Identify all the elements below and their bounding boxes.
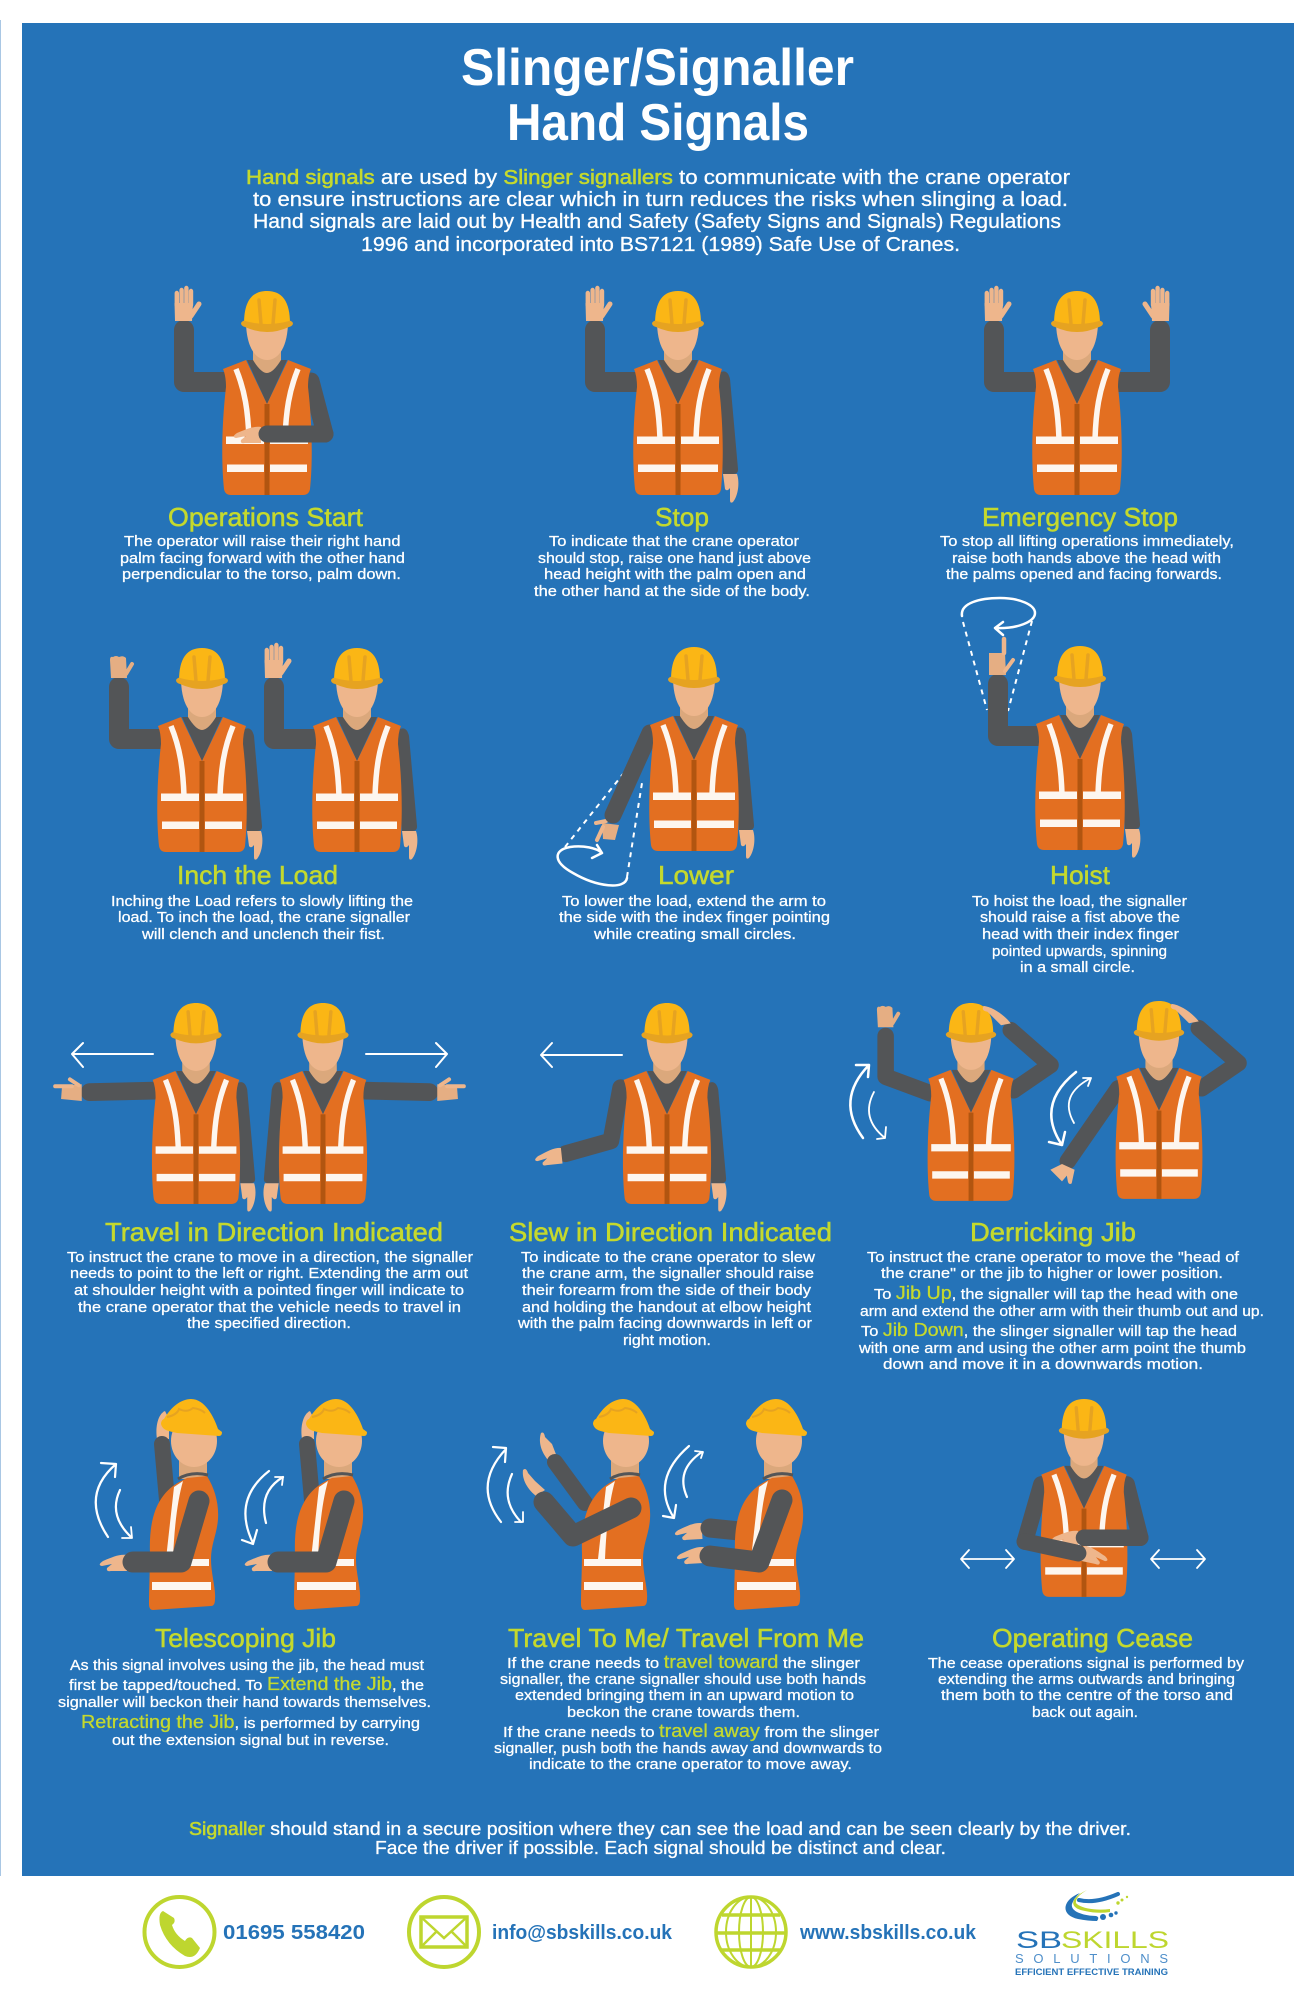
figure: stop (586, 288, 738, 503)
arrow: right double-headed (1151, 1550, 1205, 1568)
arrows: travel toward (488, 1447, 521, 1522)
arrow: left (72, 1043, 153, 1067)
description: extended bringing them in an upward motion to (515, 1687, 854, 1704)
description: needs to point to the left or right. Extending the arm out (70, 1265, 469, 1282)
description (559, 893, 830, 943)
figure: inch, palm open (264, 645, 417, 860)
closing note: Face the driver if possible. Each signal should be distinct and clear. (375, 1838, 946, 1858)
description: The cease operations signal is performed by (928, 1655, 1245, 1672)
description: To indicate to the crane operator to slew (521, 1249, 815, 1266)
intro text: Hand signals are used by Slinger signallers to communicate with the crane operator (246, 167, 1070, 189)
description (940, 533, 1234, 583)
description: should raise a fist above the (980, 909, 1180, 926)
closing note (189, 1819, 1131, 1858)
figure: pointing right (263, 1003, 464, 1211)
description: with one arm and using the other arm point the thumb (858, 1340, 1246, 1357)
description: palm facing forward with the other hand (120, 550, 405, 567)
panel: Lower (558, 647, 830, 943)
panel: Hoist (962, 598, 1187, 976)
footer: phone (144, 1897, 365, 1967)
description: the crane arm, the signaller should raise (522, 1265, 814, 1282)
heading: Slew in Direction Indicated (509, 1217, 832, 1247)
description (858, 1249, 1264, 1373)
figure: operations start (174, 288, 325, 495)
description: beckon the crane towards them. (567, 1704, 800, 1721)
intro text: 1996 and incorporated into BS7121 (1989) Safe Use of Cranes. (361, 234, 960, 256)
description: in a small circle. (1020, 959, 1135, 976)
description: out the extension signal but in reverse. (112, 1732, 389, 1749)
description: If the crane needs to travel toward the slinger (507, 1652, 860, 1672)
figure: inch, fist closed (110, 648, 262, 860)
arrows: jib up (850, 1065, 869, 1138)
arrows: travel away (663, 1446, 702, 1518)
description (972, 893, 1187, 976)
figure: extend the jib (100, 1399, 222, 1610)
intro text (246, 167, 1070, 256)
panel: Derricking Jib (850, 1001, 1264, 1373)
description: load. To inch the load, the crane signaller (118, 909, 410, 926)
arrow: left (541, 1043, 622, 1067)
logo swoosh (1065, 1890, 1128, 1921)
panel: Inch the Load (110, 645, 417, 943)
description: To hoist the load, the signaller (972, 893, 1187, 910)
description: To indicate that the crane operator (549, 533, 799, 550)
description: back out again. (1032, 1704, 1138, 1721)
description: will clench and unclench their fist. (141, 926, 385, 943)
logo: SB Skills Solutions (1015, 1890, 1169, 1978)
description (67, 1249, 473, 1332)
description: signaller, push both the hands away and downwards to (494, 1740, 882, 1757)
footer: email (409, 1897, 673, 1967)
description: Retracting the Jib , is performed by carrying (81, 1712, 420, 1732)
logo subtitle: SOLUTIONS (1015, 1951, 1168, 1966)
figure: travel to me (523, 1399, 654, 1610)
logo wordmark: SKILLS (1061, 1927, 1169, 1954)
arrow: travel away small head (695, 1451, 703, 1458)
heading: Travel To Me/ Travel From Me (508, 1623, 864, 1653)
icon: dotted cone and circle arrow (558, 774, 642, 885)
heading: Telescoping Jib (155, 1623, 336, 1653)
arrow: travel toward small head (515, 1512, 523, 1522)
description: indicate to the crane operator to move away. (529, 1756, 852, 1773)
panel: Telescoping Jib (58, 1399, 431, 1749)
heading: Derricking Jib (970, 1217, 1136, 1247)
description: them both to the centre of the torso and (941, 1687, 1233, 1704)
figure: slew (534, 1003, 727, 1211)
description: head with their index finger (982, 926, 1179, 943)
intro text: to ensure instructions are clear which in turn reduces the risks when slinging a load. (253, 189, 1068, 211)
description: arm and extend the other arm with their thumb out and up. (860, 1303, 1264, 1320)
figure: travel from me (674, 1399, 807, 1610)
arrow: left double-headed (961, 1550, 1014, 1568)
heading: Emergency Stop (982, 502, 1178, 532)
title: Slinger/Signaller (461, 39, 854, 97)
figure: retract the jib (245, 1399, 367, 1610)
heading: Inch the Load (177, 860, 338, 890)
panel: Operations Start (120, 288, 405, 583)
figure: lower (596, 647, 754, 859)
arrows: jib down small (1069, 1078, 1091, 1123)
description: To Jib Down , the slinger signaller will tap the head (861, 1320, 1237, 1340)
panel: Travel in Direction Indicated (55, 1003, 473, 1332)
title (461, 39, 854, 152)
arrows: jib up small (869, 1092, 886, 1139)
website address: www.sbskills.co.uk (799, 1922, 977, 1944)
panel: Slew in Direction Indicated (509, 1003, 832, 1349)
heading: Hoist (1050, 860, 1111, 890)
figure: jib down (1050, 1001, 1239, 1199)
heading: Operating Cease (992, 1623, 1193, 1653)
left edge line (0, 20, 1, 1876)
description: the crane" or the jib to higher or lower position. (881, 1265, 1223, 1282)
heading: Lower (658, 860, 734, 890)
description: the side with the index finger pointing (559, 909, 830, 926)
description: To Jib Up , the signaller will tap the head with one (874, 1283, 1238, 1303)
description: should stop, raise one hand just above (538, 550, 811, 567)
intro text: Hand signals are laid out by Health and Safety (Safety Signs and Signals) Regulations (253, 211, 1061, 233)
description: while creating small circles. (593, 926, 796, 943)
description: with the palm facing downwards in left or (517, 1315, 812, 1332)
description (534, 533, 811, 600)
description: perpendicular to the torso, palm down. (122, 566, 401, 583)
icon: envelope (409, 1897, 479, 1967)
description: first be tapped/touched. To Extend the Jib , the (69, 1674, 424, 1694)
arrows: extend (96, 1463, 131, 1537)
description: and holding the handout at elbow height (522, 1299, 812, 1316)
footer: website (716, 1897, 977, 1967)
email address: info@sbskills.co.uk (492, 1922, 673, 1944)
panel: Travel To Me / Travel From Me (488, 1399, 882, 1773)
arrow: retract small head (275, 1477, 283, 1485)
heading: Stop (655, 502, 709, 532)
description: raise both hands above the head with (952, 550, 1221, 567)
description: the palms opened and facing forwards. (946, 566, 1222, 583)
description: To stop all lifting operations immediately, (940, 533, 1234, 550)
description: Inching the Load refers to slowly lifting the (111, 893, 413, 910)
description: To instruct the crane operator to move the "head of (867, 1249, 1240, 1266)
arrow: extend small head (122, 1527, 132, 1538)
figure: hoist (989, 639, 1140, 858)
description: extending the arms outwards and bringing (938, 1671, 1235, 1688)
heading: Operations Start (168, 502, 364, 532)
description: down and move it in a downwards motion. (883, 1356, 1203, 1373)
description (928, 1655, 1245, 1721)
description (494, 1652, 882, 1773)
description: the specified direction. (187, 1315, 351, 1332)
closing note: Signaller should stand in a secure position where they can see the load and can be seen clearly by the driver. (189, 1819, 1131, 1839)
description: signaller will beckon their hand towards themselves. (58, 1694, 431, 1711)
panel: Emergency Stop (940, 288, 1234, 583)
description (58, 1657, 431, 1749)
figure: jib up (877, 1003, 1051, 1201)
figure: operating cease (1025, 1399, 1140, 1597)
description (120, 533, 405, 583)
figure: pointing left (55, 1003, 256, 1211)
description: The operator will raise their right hand (124, 533, 400, 550)
description: pointed upwards, spinning (992, 943, 1167, 960)
description (517, 1249, 815, 1349)
arrow: right (366, 1043, 447, 1067)
logo wordmark: SB (1016, 1927, 1062, 1954)
description: To instruct the crane to move in a direction, the signaller (67, 1249, 473, 1266)
heading: Travel in Direction Indicated (105, 1217, 443, 1247)
description: To lower the load, extend the arm to (562, 893, 826, 910)
panel: Operating Cease (928, 1399, 1245, 1721)
icon: dotted cone and circle arrow (962, 598, 1035, 711)
description: signaller, the crane signaller should use both hands (500, 1671, 866, 1688)
description: the other hand at the side of the body. (534, 583, 810, 600)
figure: emergency stop (984, 288, 1170, 495)
description: at shoulder height with a pointed finger will indicate to (74, 1282, 464, 1299)
icon: globe (716, 1897, 786, 1967)
description: As this signal involves using the jib, the head must (70, 1657, 425, 1674)
logo tagline: EFFICIENT EFFECTIVE TRAINING (1015, 1967, 1168, 1978)
description: the crane operator that the vehicle needs to travel in (78, 1299, 461, 1316)
description (111, 893, 413, 943)
title: Hand Signals (507, 94, 809, 152)
phone number: 01695 558420 (223, 1922, 365, 1944)
panel: Stop (534, 288, 811, 600)
arrows: jib down (1049, 1072, 1076, 1145)
description: If the crane needs to travel away from the slinger (503, 1721, 879, 1741)
description: their forearm from the side of their body (522, 1282, 812, 1299)
description: head height with the palm open and (544, 566, 806, 583)
arrows: retract (242, 1471, 283, 1544)
icon: phone (144, 1897, 214, 1967)
description: right motion. (623, 1332, 711, 1349)
